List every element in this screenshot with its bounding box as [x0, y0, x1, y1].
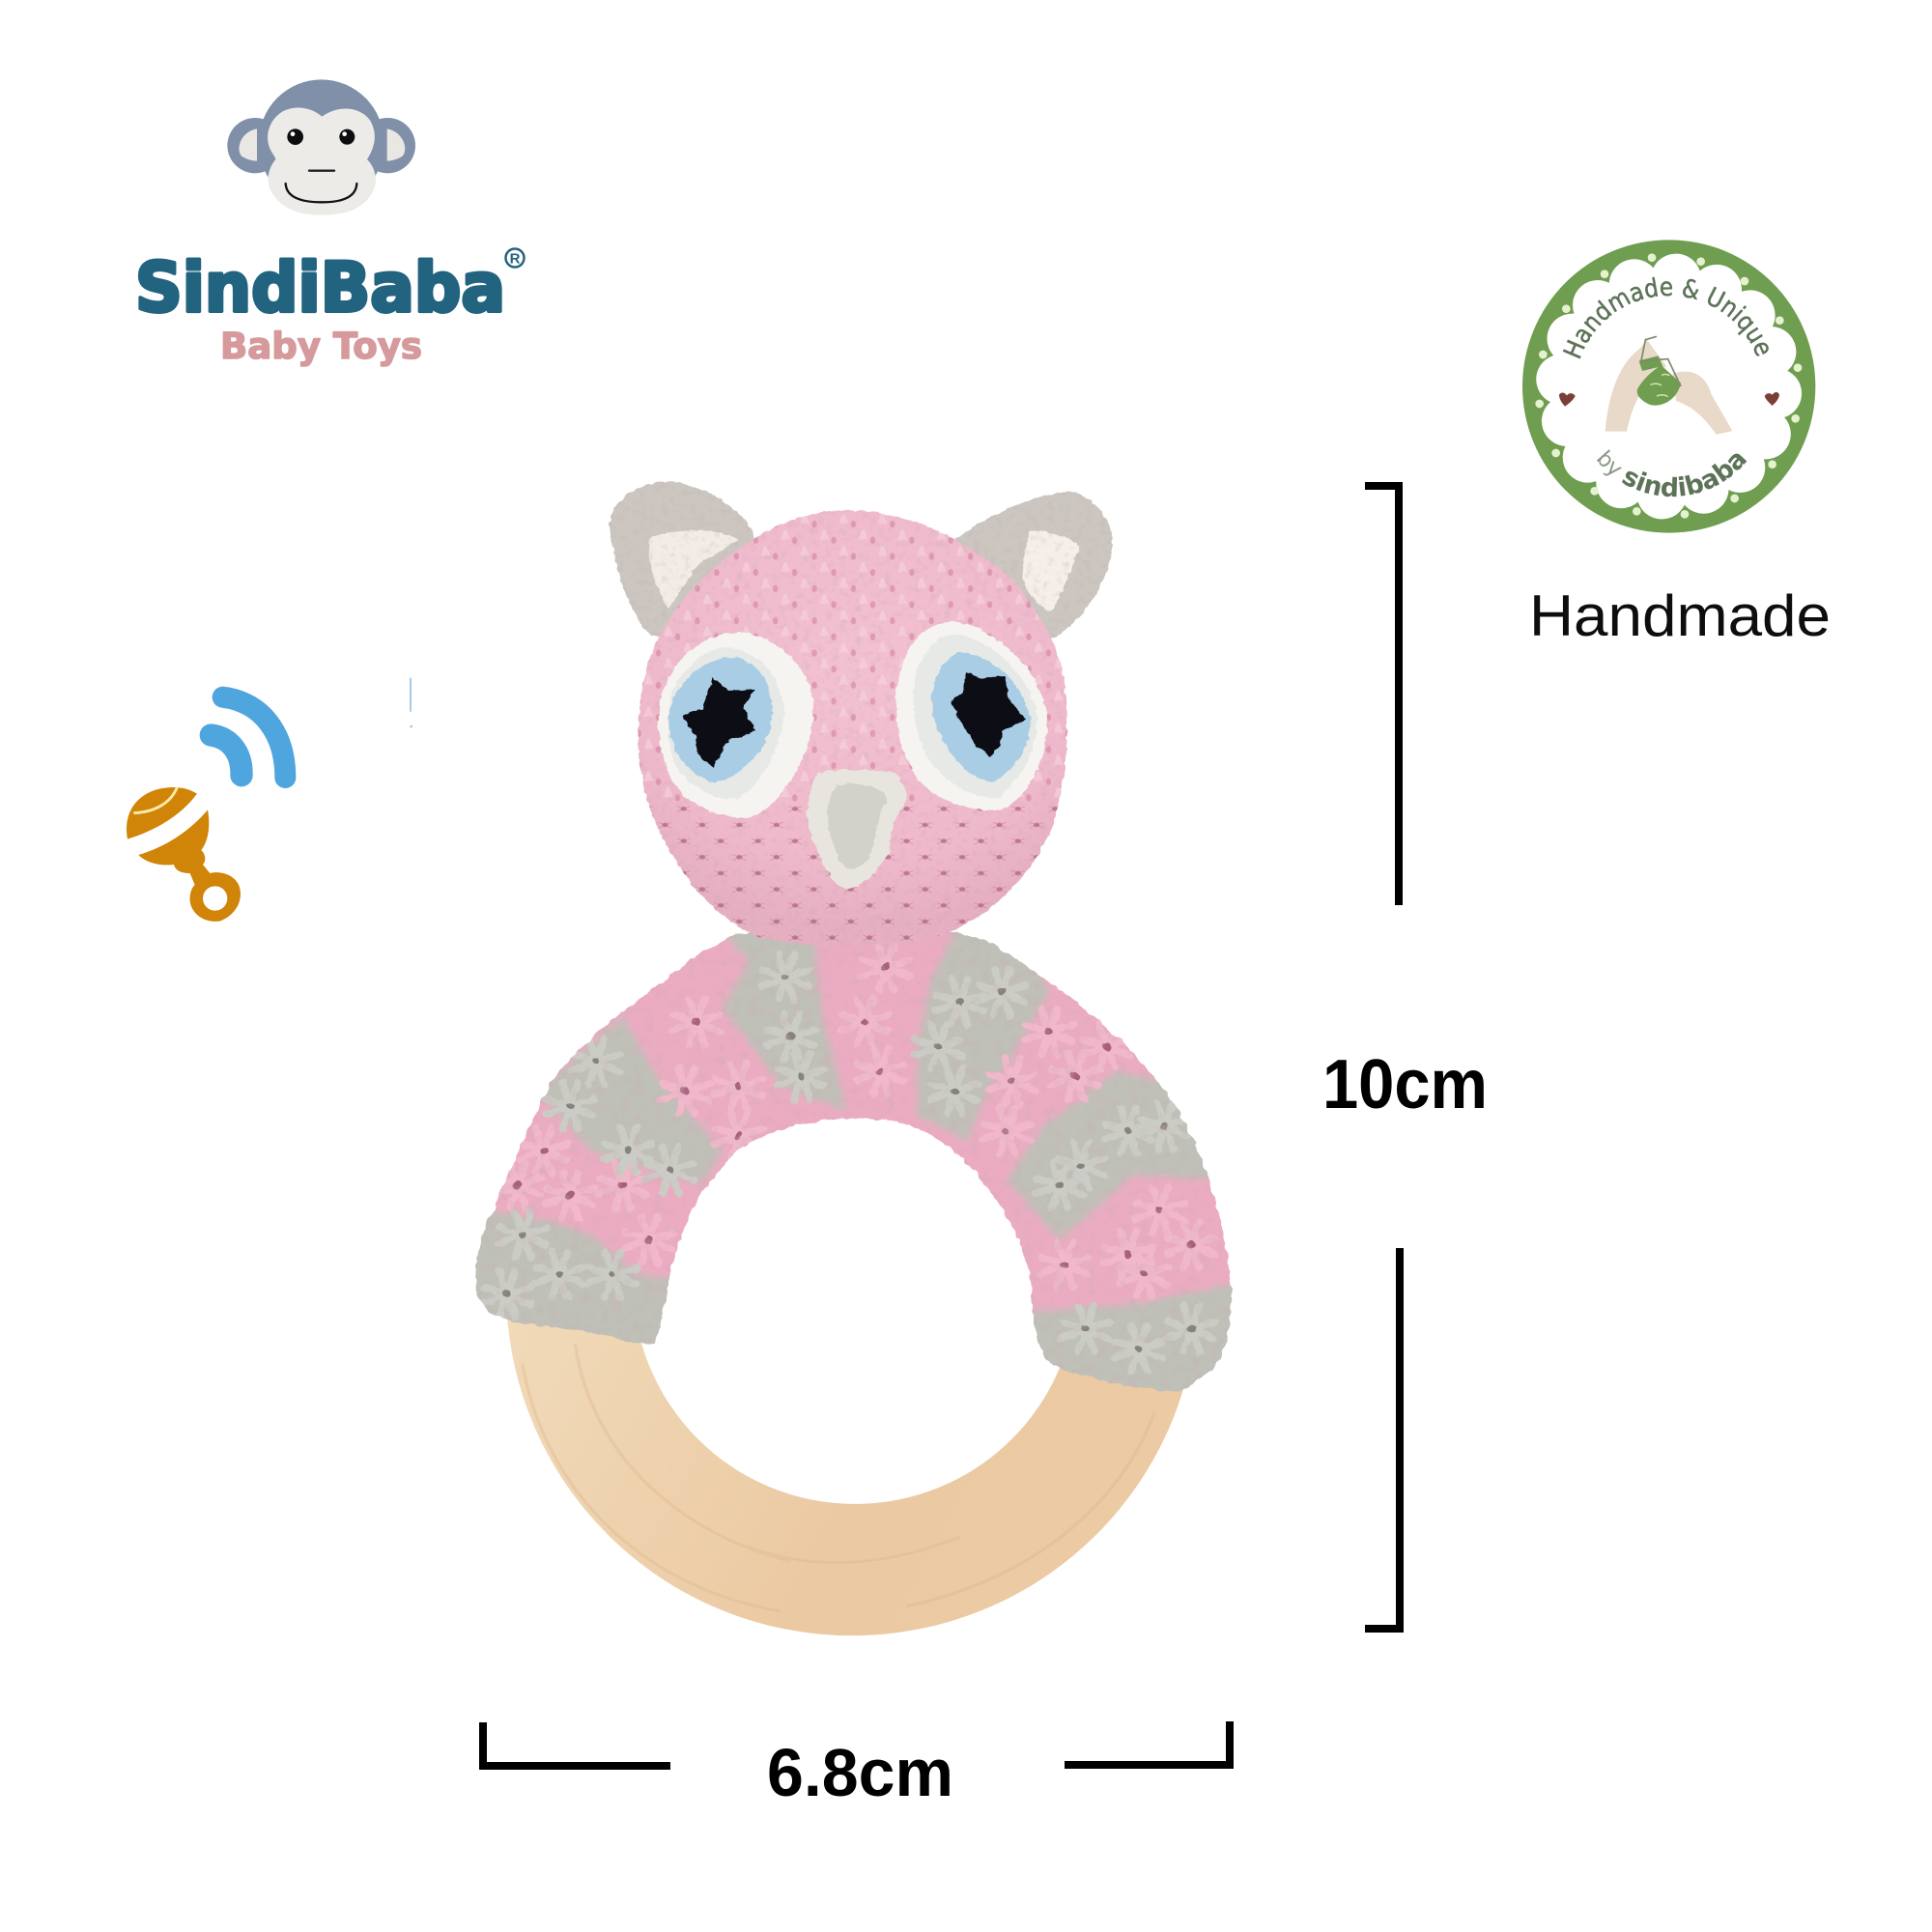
owl head — [610, 481, 1113, 950]
brand logo: SindiBaba Baby Toys — [135, 79, 524, 367]
icon: monkey face — [227, 79, 415, 215]
left ear — [610, 481, 758, 644]
width label: 6.8cm — [767, 1735, 953, 1810]
badge: Handmade & Unique by sindibaba: by sindibaba — [1596, 449, 1747, 497]
icon: rattle with sound waves — [127, 678, 412, 922]
registered mark — [506, 249, 524, 267]
crochet sleeve with pink and grey bands — [475, 931, 1233, 1392]
height dimension bracket — [1365, 486, 1400, 1629]
crochet owl rattle photo — [454, 481, 1254, 1635]
right ear — [952, 491, 1113, 644]
tagline: Baby Toys — [220, 326, 422, 367]
head stitches — [638, 510, 1067, 941]
right eye — [895, 621, 1047, 810]
brand name: SindiBaba — [135, 248, 505, 327]
infographic canvas — [127, 79, 1828, 1797]
label: Handmade: Handmade — [1529, 583, 1831, 648]
registered mark: R — [510, 251, 521, 267]
height label: 10cm — [1322, 1046, 1488, 1123]
badge: Handmade & Unique by sindibaba: Handmade & Unique — [1563, 276, 1769, 359]
wooden ring — [506, 944, 1198, 1635]
width dimension bracket — [483, 1721, 1230, 1766]
left eye — [659, 633, 813, 818]
beak — [808, 770, 907, 889]
head body — [639, 510, 1067, 946]
badge: Handmade & Unique by sindibaba — [1522, 240, 1816, 533]
